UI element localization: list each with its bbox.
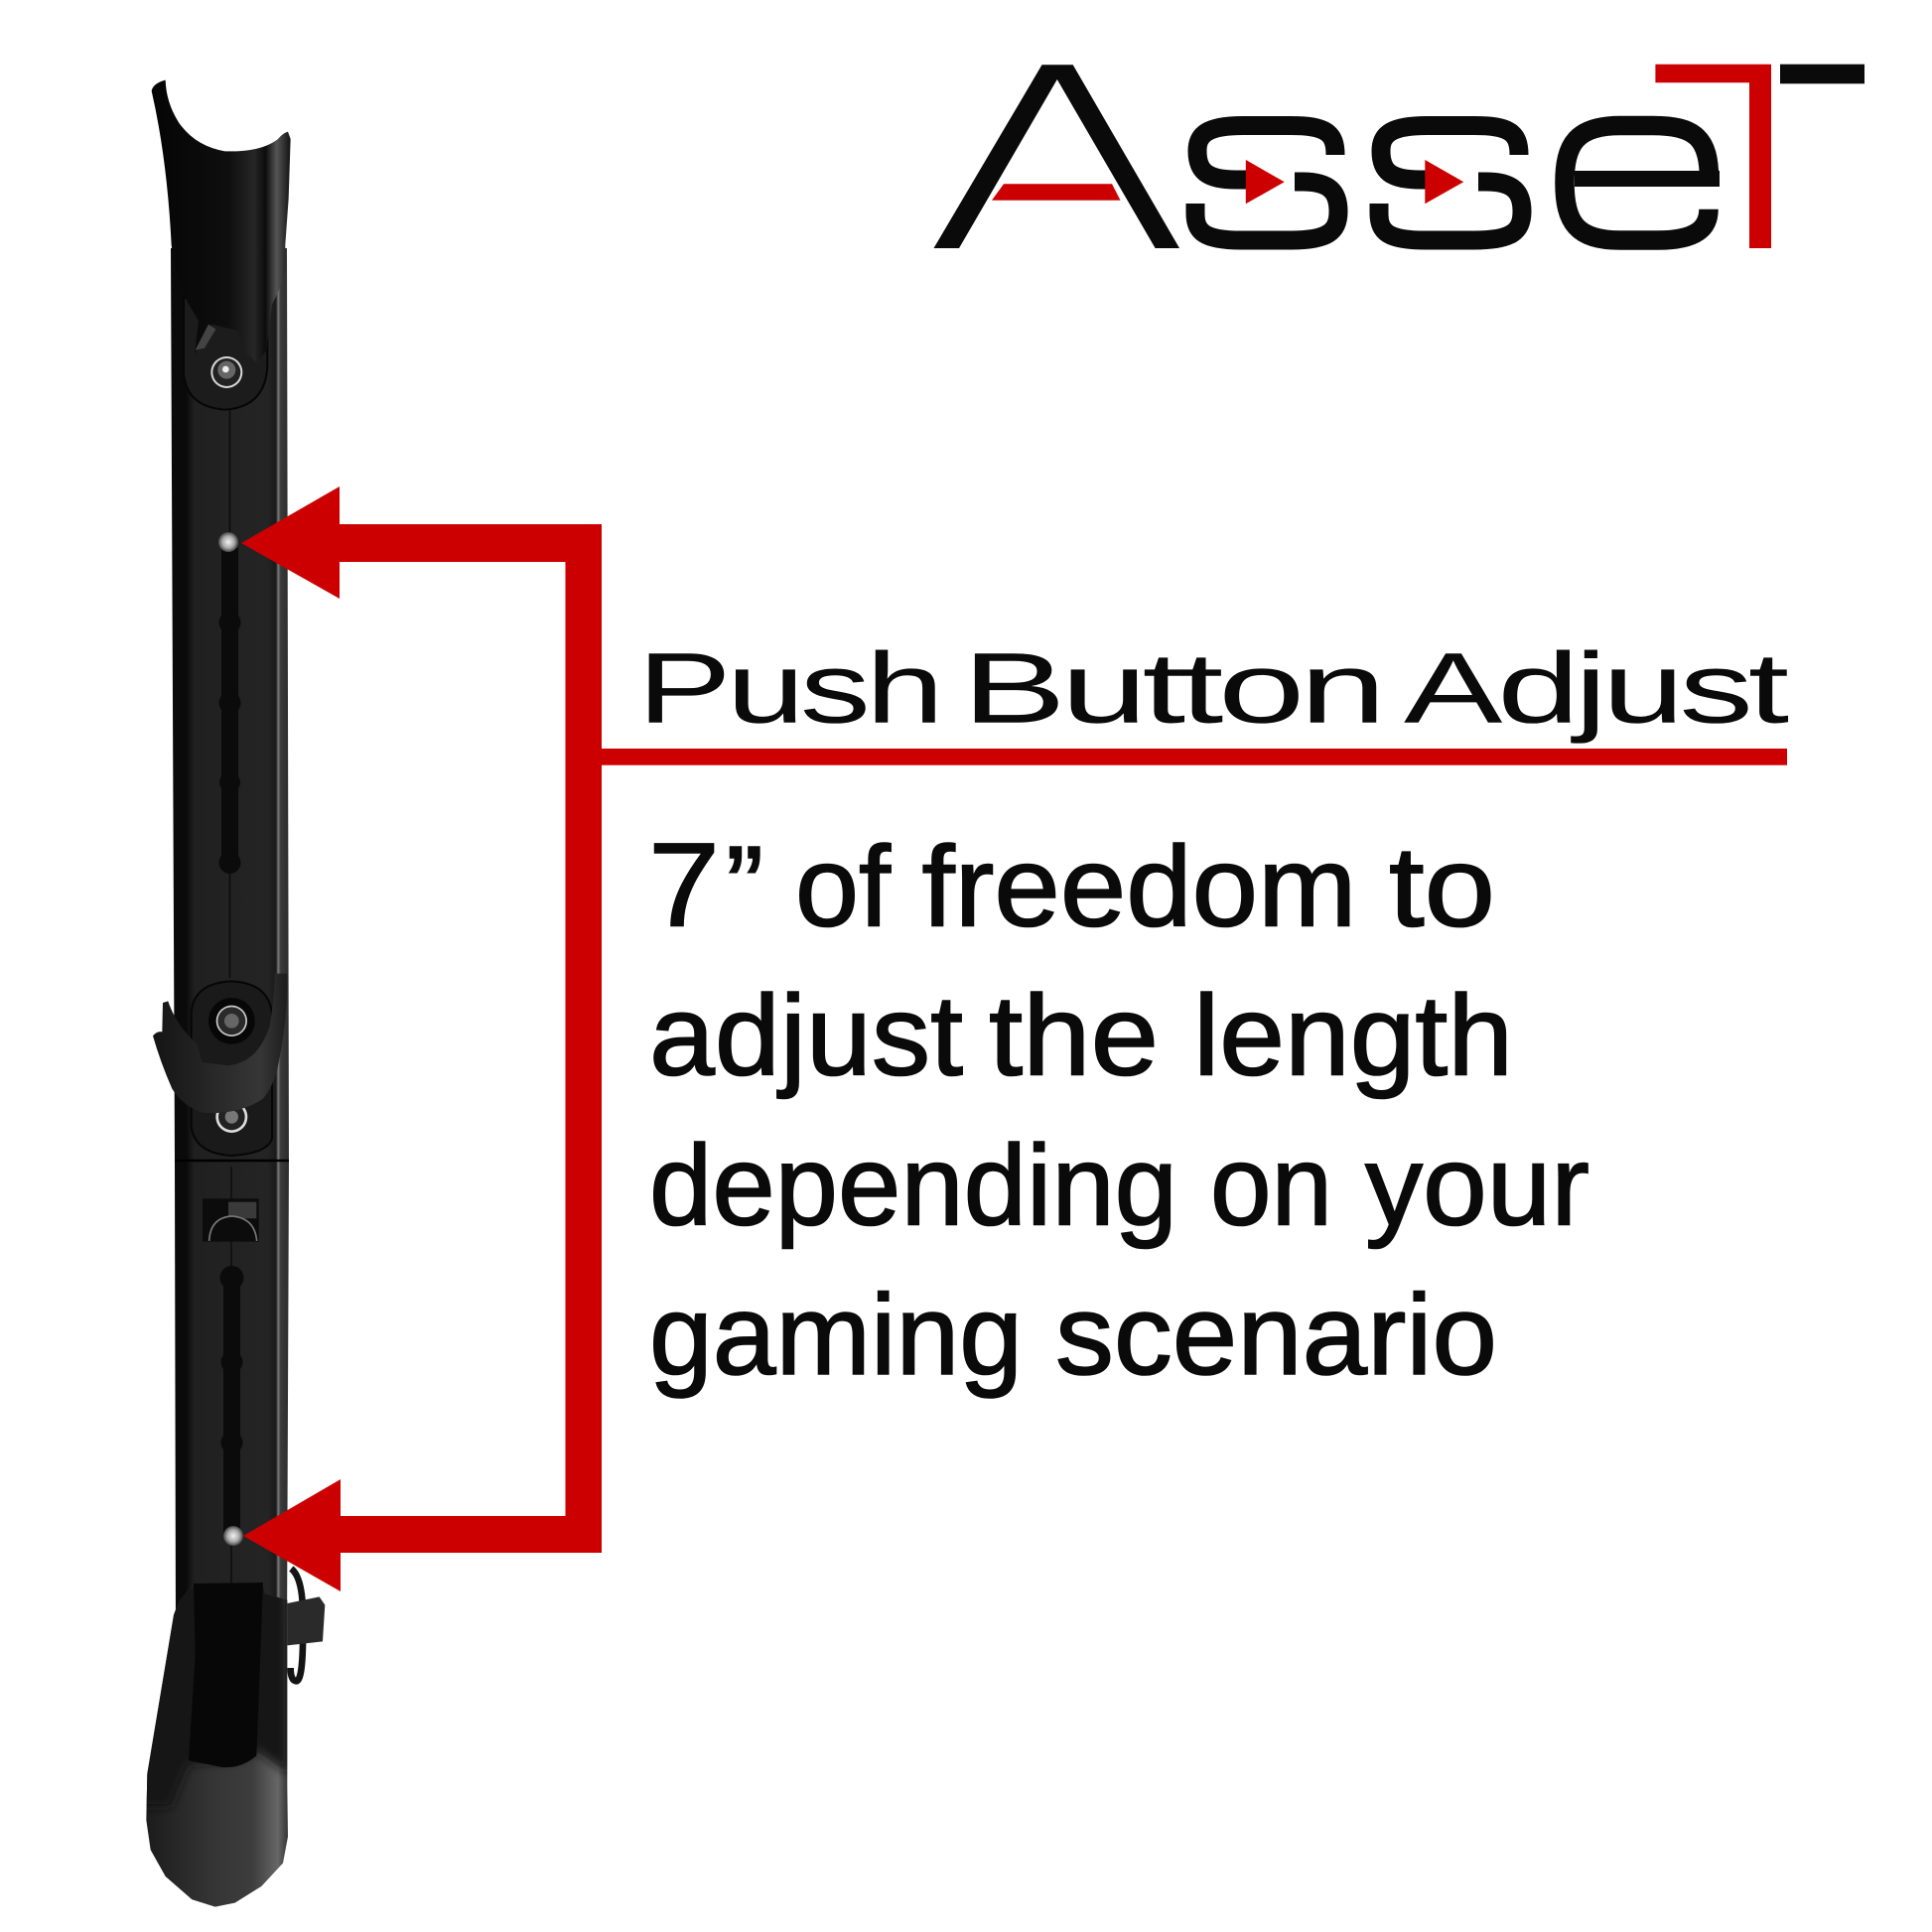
- logo red arrow first: [1246, 160, 1285, 204]
- line 2: adjust: [649, 973, 963, 1100]
- grip body: [146, 1583, 288, 1907]
- heading: Push Button Adjust: [637, 633, 1789, 745]
- connector: vertical bracket: [566, 524, 602, 1553]
- line 4: scenario: [1055, 1272, 1497, 1399]
- grip recessed face: [189, 1583, 263, 1767]
- sling knob: [287, 1596, 325, 1645]
- line 2: length: [1193, 973, 1513, 1100]
- logo red arrow second: [1425, 160, 1463, 204]
- line 3: your: [1365, 1122, 1589, 1249]
- line 1: 7: [648, 818, 720, 951]
- push button top: [218, 532, 238, 552]
- logo letter e: [1565, 125, 1720, 240]
- body text: [648, 818, 1589, 1399]
- cradle neck highlight: [196, 325, 215, 350]
- logo: Asset: [933, 65, 1864, 248]
- logo letter T red: [1655, 65, 1771, 248]
- heading: Push Button Adjust: Adjust: [1404, 633, 1789, 745]
- line 3: [649, 1122, 1589, 1249]
- top cradle shape: [152, 80, 291, 362]
- line 1: of: [795, 824, 892, 951]
- sling ring: [291, 1569, 303, 1681]
- heading: Push Button Adjust: Button: [962, 633, 1381, 745]
- keyhole hook: [203, 1198, 259, 1242]
- logo A crossbar: [992, 184, 1120, 201]
- rail centre seam: [230, 397, 231, 1588]
- line 3: on: [1210, 1122, 1332, 1249]
- line 1: freedom: [921, 824, 1356, 951]
- top bolt: [210, 356, 242, 388]
- clip cradle shape: [153, 974, 287, 1113]
- logo letter A: [933, 65, 1179, 248]
- lower adjustment slot: [220, 1266, 244, 1534]
- red bracket with two arrows: [241, 486, 602, 1591]
- grip dark upper shade: [136, 1582, 288, 1807]
- line 4: gaming: [649, 1272, 1023, 1399]
- line 1: [648, 818, 1495, 951]
- logo letter s first: [1195, 125, 1338, 240]
- upper adjustment slot: [218, 548, 240, 874]
- middle mounting plates: [192, 981, 272, 1156]
- line 2: [649, 973, 1513, 1100]
- middle clip assembly: [153, 974, 287, 1242]
- logo letter s second: [1379, 125, 1522, 240]
- line 3: depending: [649, 1122, 1177, 1249]
- line 2: the: [989, 973, 1159, 1100]
- top cradle assembly: [152, 80, 291, 410]
- line 1: ”: [726, 824, 763, 951]
- bottom grip assembly: [136, 1569, 325, 1907]
- line 1: to: [1389, 824, 1495, 951]
- heading: Push Button Adjust: Push: [637, 633, 939, 745]
- product: adjustable stock rail: [136, 80, 325, 1907]
- upper middle bolt: [208, 998, 255, 1044]
- heading underline: [602, 749, 1787, 765]
- line 4: [649, 1272, 1497, 1399]
- top mounting plate: [184, 298, 267, 410]
- bottom arrow: [243, 1479, 602, 1591]
- logo T black bar: [1780, 65, 1864, 83]
- lower middle bolt: [215, 1101, 247, 1133]
- top arrow: [241, 486, 602, 599]
- main rail body: [171, 248, 289, 1638]
- rail segment joint: [175, 1160, 289, 1162]
- push button bottom: [223, 1526, 243, 1546]
